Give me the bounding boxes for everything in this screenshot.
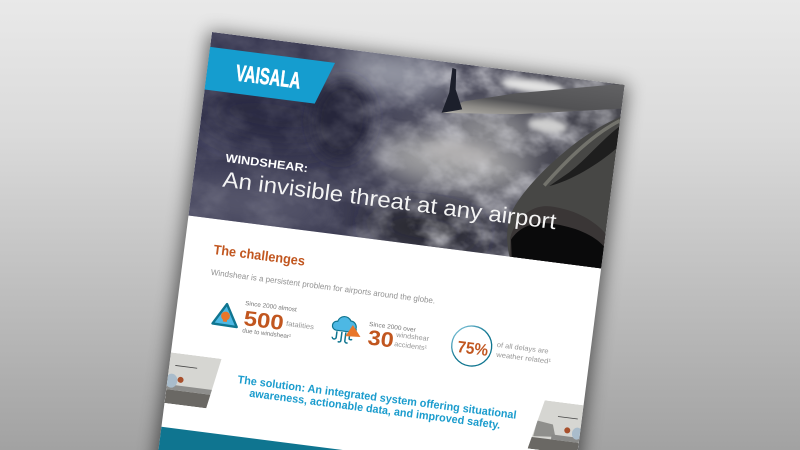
dark cowl band bbox=[550, 126, 620, 186]
stat: 500 fatalities bbox=[212, 296, 317, 343]
solution line two: awareness, actionable data, and improved safety. bbox=[249, 388, 501, 432]
logo wordmark: VAISALA bbox=[234, 59, 302, 94]
icon: warning triangle with skull bbox=[212, 303, 239, 327]
stat unit: fatalities bbox=[286, 321, 315, 331]
stat: 75% delays bbox=[449, 324, 555, 376]
solution statement bbox=[235, 374, 517, 434]
icon: storm cloud with warning bbox=[330, 315, 363, 345]
photo: left airfield bbox=[162, 352, 222, 409]
engine intake bbox=[511, 223, 604, 268]
stat caption: of all delays are bbox=[496, 342, 549, 356]
page shadow bbox=[130, 32, 628, 450]
logo banner bbox=[205, 47, 335, 106]
hero title bbox=[221, 153, 560, 234]
cowl highlight bbox=[543, 119, 620, 186]
stat: 30 accidents bbox=[330, 315, 431, 357]
stat note: due to windshear¹ bbox=[242, 327, 291, 340]
headline: An invisible threat at any airport bbox=[221, 167, 558, 234]
photo: right airfield bbox=[528, 399, 586, 450]
stat unit: windshear bbox=[395, 332, 430, 343]
intro text: Windshear is a persistent problem for airports around the globe. bbox=[210, 268, 436, 305]
stat lead-in: Since 2000 over bbox=[369, 321, 416, 334]
hero photo: storm clouds and aircraft wing bbox=[188, 32, 624, 268]
aircraft engine bbox=[507, 117, 620, 268]
infographic page bbox=[158, 32, 624, 450]
section heading: The challenges bbox=[213, 242, 306, 269]
kicker: WINDSHEAR: bbox=[225, 153, 309, 175]
teal footer band bbox=[133, 427, 574, 450]
stat lead-in: Since 2000 almost bbox=[245, 300, 297, 314]
solution line one: The solution: An integrated system offering situational bbox=[237, 374, 517, 422]
nacelle bbox=[507, 117, 620, 268]
stat number: 30 bbox=[366, 326, 395, 352]
progress ring bbox=[449, 324, 494, 368]
winglet bbox=[442, 68, 462, 113]
stat caption line two: weather related¹ bbox=[495, 352, 552, 366]
stat unit line two: accidents¹ bbox=[394, 341, 428, 352]
stat number: 500 bbox=[242, 307, 285, 335]
engine lip bbox=[510, 206, 606, 268]
stat number: 75% bbox=[456, 338, 490, 360]
aircraft wing bbox=[442, 84, 624, 114]
